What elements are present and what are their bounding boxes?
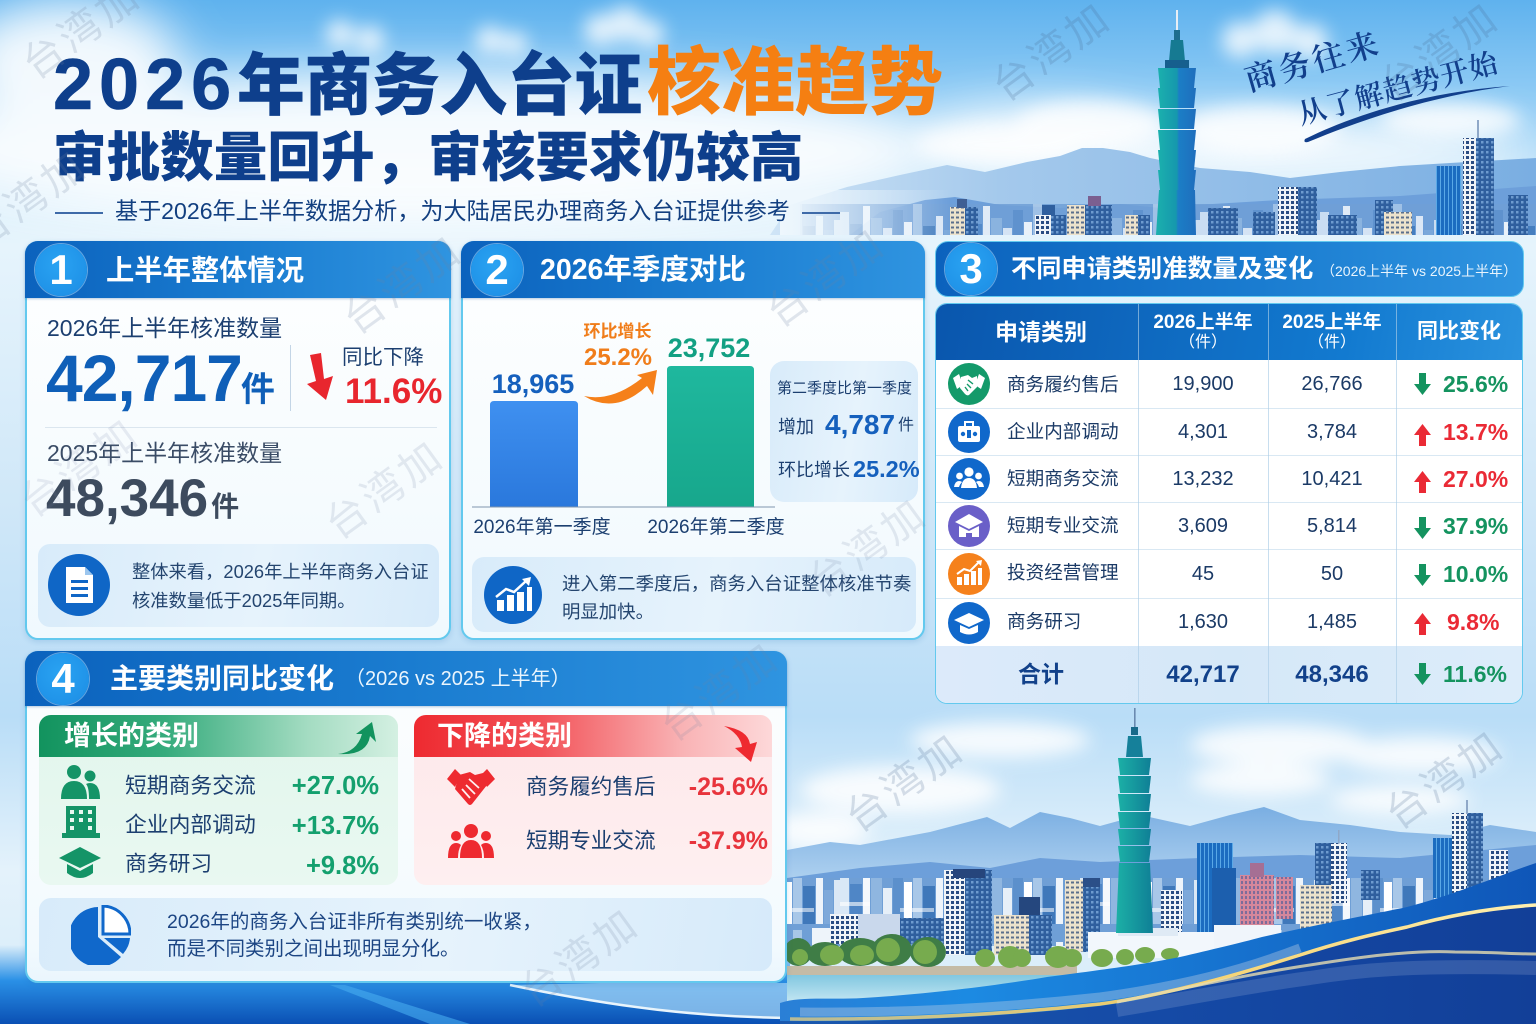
- row: 短期专业交流: [936, 502, 1522, 549]
- note: second quarter pace: [472, 557, 916, 632]
- side callout: Q2 increase: 增加: [778, 417, 814, 437]
- row: 短期专业交流 -37.9%: 短期专业交流: [526, 828, 656, 853]
- panel 1 header: 1: [49, 246, 73, 293]
- watermarks: 台湾加: [758, 219, 894, 336]
- row: 商务研习: 商务研习: [1007, 611, 1081, 632]
- row: total: 合计: [1018, 660, 1064, 686]
- icon: graduation cap: [948, 602, 990, 644]
- note text: [167, 913, 552, 961]
- panel 1: overall first half: [25, 241, 451, 640]
- title: [53, 41, 943, 125]
- icon: rising chart: [484, 566, 542, 624]
- watermarks: 台湾加: [12, 409, 148, 526]
- row: 商务研习: [936, 598, 1522, 646]
- top Taipei 101: [1156, 10, 1196, 235]
- row: 商务研习: 1,630: [1178, 611, 1228, 633]
- row: 短期商务交流 +27.0%: 短期商务交流: [125, 773, 256, 798]
- data table: [935, 303, 1523, 704]
- year-on-year decline: 11.6%: [345, 372, 442, 411]
- icon: red down arrow: [307, 353, 333, 400]
- bottom Taipei 101: [1116, 708, 1153, 933]
- card: growing categories: [39, 715, 398, 885]
- panel 4: main category changes: [25, 651, 787, 983]
- card: declining categories: [414, 715, 772, 885]
- bar chart: Q1 vs Q2: 2026年第一季度: [473, 516, 611, 538]
- watermarks: 台湾加: [512, 899, 648, 1016]
- row: 商务履约售后: 19,900: [1172, 372, 1234, 394]
- panel 2 header: 2: [485, 246, 509, 293]
- row: 企业内部调动: 3,784: [1307, 420, 1357, 442]
- row: 商务研习 +9.8%: 商务研习: [125, 851, 212, 876]
- icon: red handshake: [447, 769, 495, 805]
- row: 商务履约售后: 26,766: [1301, 372, 1363, 394]
- row: 商务履约售后: 商务履约售后: [1007, 374, 1119, 394]
- table header row: （件）: [1179, 334, 1227, 351]
- icon: down arrow: [1414, 564, 1431, 586]
- note: overall summary: [38, 544, 439, 627]
- row: 短期商务交流 +27.0%: [61, 765, 379, 800]
- row: 企业内部调动 +13.7%: 企业内部调动: [125, 812, 256, 837]
- row: 商务履约售后: 25.6%: [1443, 370, 1508, 396]
- 2026 approved count value: 42,717件: [46, 341, 275, 415]
- divider: [45, 427, 437, 428]
- panel 2 header: 2026年季度对比: [540, 254, 746, 286]
- icon: down arrow: [1414, 517, 1431, 539]
- side callout: Q2 increase: 25.2%: [853, 456, 920, 482]
- slogan: handwritten: 商务往来: [1239, 18, 1386, 101]
- row: 短期商务交流: 短期商务交流: [1007, 468, 1119, 488]
- note text: 而是不同类别之间出现明显分化。: [167, 938, 460, 960]
- row: 短期商务交流: [936, 455, 1522, 502]
- table header row: 同比变化: [1417, 320, 1501, 343]
- divider: [290, 345, 291, 411]
- row: 企业内部调动 +13.7%: +13.7%: [292, 812, 379, 840]
- bottom wave with gold ribbons: [780, 863, 1536, 1024]
- 2025 approved count label: 2025年上半年核准数量: [47, 440, 282, 466]
- title: 2026年商务入台证: [53, 45, 642, 125]
- row: 企业内部调动: 13.7%: [1443, 418, 1508, 444]
- table header row: 2026上半年: [1153, 312, 1253, 333]
- title: 核准趋势: [647, 41, 943, 124]
- bar chart: Q1 vs Q2: 23,752: [668, 333, 750, 363]
- panel 3 header: [935, 241, 1524, 297]
- row: 企业内部调动: 企业内部调动: [1007, 420, 1119, 442]
- icon: green cap: [59, 847, 101, 878]
- riverside trees, promenade, water: [784, 934, 1179, 1004]
- row: 短期专业交流: 短期专业交流: [1007, 514, 1119, 536]
- row: 商务履约售后 -25.6%: -25.6%: [689, 773, 768, 801]
- row: 短期商务交流: 13,232: [1172, 468, 1234, 490]
- row: 短期商务交流 +27.0%: +27.0%: [292, 772, 379, 800]
- tagline with side rules: 基于2026年上半年数据分析，为大陆居民办理商务入台证提供参考: [115, 198, 790, 224]
- row: total: [936, 646, 1522, 703]
- note text: 2026年的商务入台证非所有类别统一收紧，: [167, 911, 542, 933]
- row: 短期专业交流: 5,814: [1307, 514, 1357, 536]
- row: 商务履约售后 -25.6%: [447, 769, 768, 805]
- growing header: 增长的类别: [64, 721, 199, 751]
- bottom-left blue strip: [0, 945, 790, 1024]
- side callout: Q2 increase: 第二季度比第一季度: [777, 380, 912, 397]
- table header row: 申请类别: [995, 319, 1087, 345]
- icon: document: [48, 554, 110, 616]
- bar chart: Q1 vs Q2: 2026年第二季度: [647, 516, 785, 538]
- panel 3 header: 3: [959, 245, 983, 292]
- icon: red down arrow: [724, 726, 757, 762]
- note text: 整体来看，2026年上半年商务入台证: [132, 561, 429, 582]
- note text: 核准数量低于2025年同期。: [132, 590, 355, 611]
- side callout: Q2 increase: 环比增长: [778, 460, 850, 480]
- icon: briefcase: [948, 411, 990, 453]
- row: 短期商务交流: 27.0%: [1443, 466, 1508, 492]
- icon: green building: [62, 806, 100, 838]
- row: 短期商务交流: 10,421: [1301, 468, 1363, 490]
- row: 企业内部调动: 4,301: [1178, 420, 1228, 442]
- declining header: 下降的类别: [437, 721, 572, 751]
- declining header: [414, 715, 772, 757]
- row: 企业内部调动: [936, 408, 1522, 455]
- row: 短期专业交流 -37.9%: -37.9%: [689, 827, 768, 855]
- note text: 明显加快。: [562, 601, 654, 622]
- bar chart: Q1 vs Q2: 环比增长: [584, 322, 652, 341]
- slogan: handwritten: [1239, 18, 1510, 142]
- table header row: [936, 304, 1522, 360]
- bar chart: Q1 vs Q2: [472, 322, 785, 538]
- top mountains: [770, 148, 1536, 235]
- row: 短期专业交流 -37.9%: [448, 824, 768, 858]
- bar chart: Q1 vs Q2: 18,965: [492, 369, 574, 399]
- panel 1 header: 上半年整体情况: [106, 254, 304, 286]
- watermarks: 台湾加: [652, 633, 788, 750]
- icon: up arrow: [1414, 613, 1431, 635]
- watermarks: 台湾加: [317, 431, 453, 548]
- panel 2 header: [461, 241, 925, 298]
- icon: people: [948, 458, 990, 500]
- row: 投资经营管理: [936, 549, 1522, 598]
- note text: [132, 561, 429, 611]
- year-on-year decline: [342, 346, 442, 411]
- row: 投资经营管理: 投资经营管理: [1007, 562, 1119, 582]
- panel 2: quarterly comparison: [461, 241, 925, 640]
- row: 商务研习 +9.8%: [59, 847, 379, 880]
- panel 4 header: 主要类别同比变化: [110, 663, 334, 694]
- row: 短期专业交流: 37.9%: [1443, 512, 1508, 538]
- row: 商务履约售后 -25.6%: 商务履约售后: [526, 774, 656, 799]
- panel 3 header: 不同申请类别准数量及变化: [1011, 255, 1313, 283]
- watermarks: 台湾加: [800, 489, 936, 606]
- icon: down arrow: [1414, 663, 1431, 685]
- icon: up arrow: [1414, 471, 1431, 493]
- row: 商务研习 +9.8%: +9.8%: [306, 852, 379, 880]
- panel 4 header: （2026 vs 2025 上半年）: [345, 668, 571, 690]
- top buildings: [950, 120, 1528, 235]
- icon: green people: [61, 765, 100, 799]
- bottom mountains: [787, 807, 1536, 900]
- 2025 approved count value: 48,346件: [46, 469, 239, 528]
- lower sky clouds: [770, 722, 1500, 848]
- row: 商务研习: 1,485: [1307, 611, 1357, 633]
- row: 商务研习: 9.8%: [1447, 609, 1499, 635]
- icon: academic building: [948, 505, 990, 547]
- panel 3: categories table: [935, 241, 1524, 704]
- panel 4 header: 4: [51, 655, 75, 702]
- panel 1 header: [25, 241, 451, 298]
- watermarks: 台湾加: [335, 226, 471, 343]
- icon: down arrow: [1414, 373, 1431, 395]
- panel 3 header: （2026上半年 vs 2025上半年）: [1321, 263, 1517, 279]
- row: total: 42,717: [1166, 660, 1240, 688]
- note text: [562, 573, 911, 622]
- icon: up arrow: [1414, 424, 1431, 446]
- table header row: 2025上半年: [1282, 312, 1382, 333]
- row: 短期专业交流: 3,609: [1178, 514, 1228, 536]
- table header row: （件）: [1308, 334, 1356, 351]
- watermarks: 台湾加: [837, 724, 973, 841]
- note text: 进入第二季度后，商务入台证整体核准节奏: [562, 573, 911, 594]
- icon: handshake: [948, 363, 990, 405]
- 2026 approved count label: 2026年上半年核准数量: [47, 315, 282, 341]
- icon: red people: [448, 824, 494, 858]
- row: total: 48,346: [1295, 660, 1369, 688]
- row: total: 11.6%: [1443, 661, 1507, 687]
- bottom buildings: [812, 800, 1508, 958]
- note: divergence summary: [39, 898, 772, 971]
- row: 投资经营管理: 50: [1321, 562, 1343, 584]
- row: 商务履约售后: [948, 363, 1508, 405]
- subtitle headline: 审批数量回升，审核要求仍较高: [53, 128, 803, 188]
- bar chart: Q1 vs Q2: 25.2%: [584, 344, 652, 371]
- row: 投资经营管理: 45: [1192, 562, 1214, 584]
- row: 企业内部调动 +13.7%: [62, 806, 379, 840]
- side callout: Q2 increase: 4,787: [825, 409, 895, 440]
- icon: orange chart: [948, 553, 990, 595]
- side callout: Q2 increase: [770, 361, 918, 502]
- icon: green up arrow: [338, 722, 376, 754]
- panel 4 header: [25, 651, 787, 706]
- icon: pie chart: [71, 905, 131, 965]
- side callout: Q2 increase: 件: [898, 417, 914, 434]
- slogan: handwritten: 从了解趋势开始: [1293, 40, 1503, 133]
- watermarks: 台湾加: [1377, 721, 1513, 838]
- year-on-year decline: 同比下降: [342, 346, 424, 369]
- row: 投资经营管理: 10.0%: [1443, 560, 1508, 586]
- growing header: [39, 715, 398, 757]
